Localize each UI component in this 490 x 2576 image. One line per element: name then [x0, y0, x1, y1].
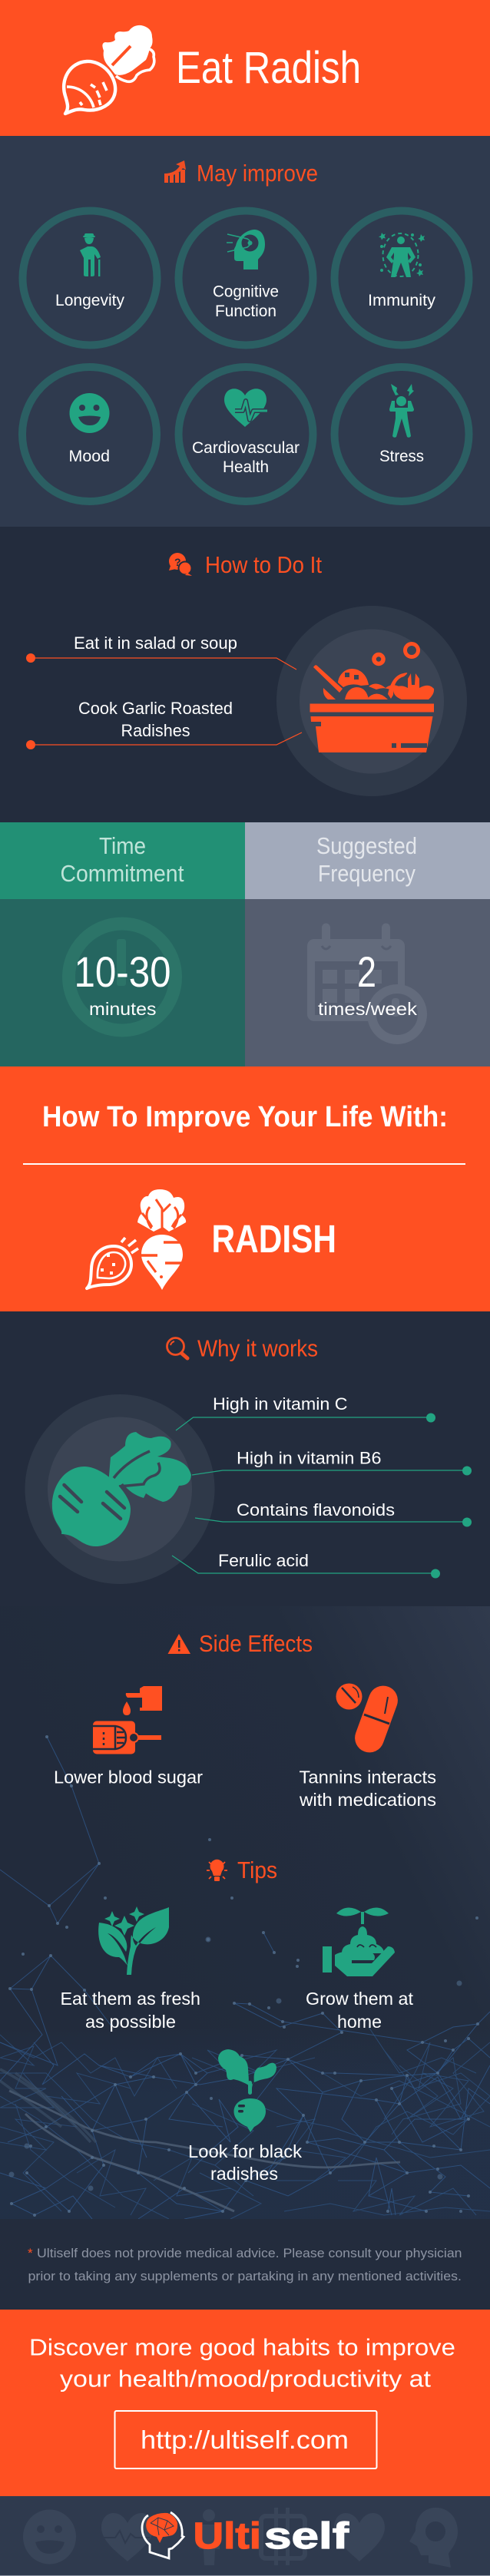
benefit: longevity [23, 210, 157, 346]
callout: flavonoids [195, 1500, 472, 1526]
panel: footer [0, 2496, 490, 2576]
label: Immunity [368, 292, 436, 309]
icon: seedling in hand [323, 1907, 395, 1976]
benefit: mood [22, 367, 157, 501]
icon backdrop circles [276, 606, 467, 796]
label: Tannins interacts [300, 1767, 436, 1787]
logo wordmark: Ulti [194, 2516, 261, 2557]
icon: rising chart [164, 160, 186, 183]
panel: may improve [0, 136, 490, 527]
label: Look for black [188, 2141, 303, 2161]
label: Stress [379, 448, 424, 465]
panel: time commitment [0, 822, 245, 1066]
heading line two: Frequency [318, 860, 416, 887]
icon: small radish [218, 2049, 276, 2132]
logo head [142, 2512, 184, 2558]
panel: suggested frequency [245, 822, 490, 1066]
heading: time commitment: Time [99, 832, 146, 859]
callout: garlic roasted radishes: Radishes [121, 721, 190, 740]
icon: two radishes [87, 1189, 186, 1290]
label: radishes [210, 2164, 278, 2184]
icon: salad bowl [310, 643, 434, 752]
disclaimer text [28, 2246, 462, 2283]
value: 10-30: 10-30 [74, 947, 171, 996]
icon: question chat bubbles [169, 553, 192, 576]
call to action text [29, 2334, 455, 2392]
call to action text: Discover more good habits to improve [29, 2334, 455, 2360]
callout: salad or soup: Eat it in salad or soup [74, 633, 237, 653]
icon: question chat bubbles: ? [174, 556, 181, 568]
icon: smiley [69, 393, 109, 433]
callout: vitamin c: High in vitamin C [213, 1394, 348, 1414]
icon: warning triangle [167, 1634, 190, 1654]
ghost icons [23, 2508, 458, 2568]
unit: times/week: times/week [318, 999, 418, 1019]
link button [115, 2411, 376, 2469]
label: Health [223, 458, 269, 476]
label: Longevity [55, 292, 124, 309]
icon: head with gear [227, 230, 265, 270]
heading: side effects: Side Effects [199, 1630, 313, 1657]
side effect: lower blood sugar [54, 1686, 203, 1787]
tip: eat fresh [60, 1906, 200, 2032]
icon: light bulb [207, 1860, 227, 1881]
callout: garlic roasted radishes [26, 699, 302, 749]
panel: side effects and tips [0, 1606, 490, 2219]
side effect: tannins [299, 1682, 436, 1810]
label: as possible [85, 2012, 176, 2032]
icon: pills [336, 1682, 402, 1757]
label: Lower blood sugar [54, 1767, 203, 1787]
link button: http://ultiself.com [141, 2426, 349, 2454]
heading line two: Commitment [60, 860, 184, 887]
icon: radish [52, 1432, 191, 1546]
disclaimer text: Ultiself does not provide medical advice. Please consult your physician [37, 2246, 462, 2260]
title: Eat Radish [176, 43, 361, 93]
icon: protected person [379, 233, 425, 277]
label: Function [215, 303, 276, 320]
heading: why it works: Why it works [197, 1334, 318, 1362]
icon: calendar ghost [307, 928, 422, 1040]
heading: tips: Tips [237, 1857, 277, 1883]
heading: how to do it: How to Do It [205, 551, 322, 578]
callout: vitamin b6 [192, 1448, 472, 1476]
icon: heart with pulse [224, 389, 267, 427]
callout: garlic roasted radishes: Cook Garlic Roasted [78, 699, 233, 718]
heading: radish: RADISH [212, 1217, 336, 1261]
panel: how to improve [0, 1066, 490, 1311]
benefit: cardiovascular health [178, 367, 313, 501]
icon: magnifier [167, 1338, 187, 1358]
label: home [337, 2012, 382, 2032]
benefit: immunity [335, 210, 468, 346]
disclaimer text: * [28, 2246, 33, 2260]
label: Cardiovascular [192, 439, 300, 457]
benefit: cognitive function [178, 210, 313, 346]
label: Mood [69, 448, 110, 465]
panel: header [0, 0, 490, 136]
label: with medications [299, 1790, 436, 1810]
logo wordmark: self [264, 2516, 349, 2557]
icon: stressed person [389, 384, 414, 438]
tip: grow at home [306, 1907, 414, 2032]
icon: radish outline [64, 25, 154, 114]
callout: vitamin c [176, 1394, 435, 1430]
icon: old man with cane [80, 233, 101, 276]
value: 2: 2 [357, 947, 376, 996]
network background [0, 1737, 490, 2219]
callout: salad or soup [26, 633, 296, 670]
disclaimer text: prior to taking any supplements or partaking in any mentioned activities. [28, 2269, 462, 2283]
unit: minutes: minutes [89, 999, 157, 1019]
logo: ultiself [142, 2512, 349, 2558]
label: Cognitive [213, 283, 279, 301]
heading: How To Improve Your Life With: [42, 1101, 448, 1133]
panel: why it works [0, 1311, 490, 1606]
heading: suggested frequency: Suggested [316, 832, 417, 859]
icon: glucose meter [93, 1686, 162, 1754]
callout: ferulic acid [172, 1551, 440, 1579]
icon: fresh leaves [98, 1906, 169, 1975]
callout: vitamin b6: High in vitamin B6 [237, 1448, 381, 1468]
tip: black radishes [188, 2049, 303, 2184]
panel: disclaimer [0, 2219, 490, 2310]
label: Eat them as fresh [60, 1989, 200, 2009]
callout: flavonoids: Contains flavonoids [237, 1500, 395, 1519]
icon: stopwatch ghost [69, 924, 175, 1030]
label: Grow them at [306, 1989, 414, 2009]
panel: call to action [0, 2310, 490, 2496]
heading: may improve: May improve [197, 160, 318, 187]
benefit: stress [335, 367, 468, 501]
icon backdrop circles [25, 1394, 215, 1584]
call to action text: your health/mood/productivity at [60, 2365, 431, 2392]
panel: how to do it [0, 527, 490, 822]
callout: ferulic acid: Ferulic acid [218, 1551, 309, 1570]
